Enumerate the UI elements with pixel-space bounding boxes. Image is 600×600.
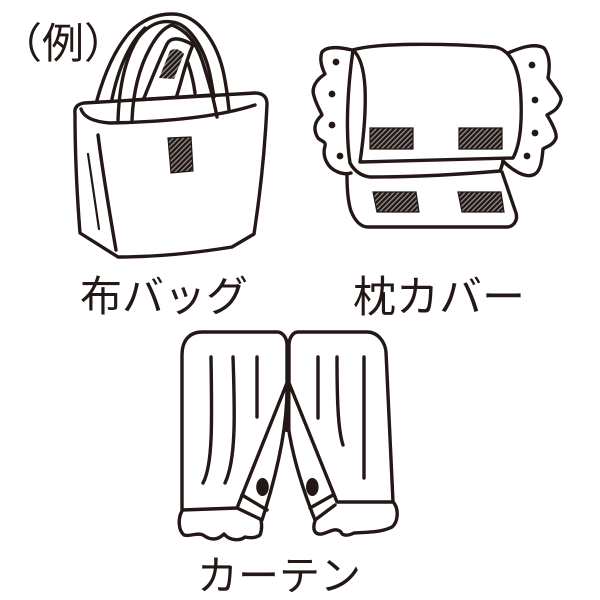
tieback bands (242, 495, 333, 510)
left frill (179, 511, 262, 540)
bag rim (81, 105, 255, 123)
label: cloth bag: 布バッグ (80, 273, 248, 320)
curtain centre seam (286, 340, 290, 432)
pillow body (347, 50, 503, 177)
bag side folds (98, 135, 116, 250)
hatched tabs (370, 128, 413, 149)
right frill (314, 503, 397, 535)
icon: curtain (179, 332, 397, 540)
pillow lower flap (347, 172, 517, 227)
tieback buttons (256, 478, 269, 496)
left curtain edge (237, 383, 287, 520)
label: example mark: （例） (0, 20, 126, 67)
hatched tag on bag (168, 137, 193, 173)
left frill (313, 48, 352, 174)
pillow front flap (353, 44, 521, 162)
pleats (203, 357, 364, 483)
right curtain edge (288, 425, 335, 520)
bag handles (97, 14, 229, 120)
label: curtain: カーテン (197, 553, 361, 599)
hatched tag on inner bag (159, 49, 184, 79)
right frill (503, 46, 561, 176)
frill holes (329, 59, 538, 159)
right curtain panel (289, 332, 393, 502)
left curtain panel (182, 332, 287, 510)
bag body (75, 93, 267, 257)
icon: pillow cover (313, 44, 561, 227)
icon: cloth bag (75, 14, 267, 257)
label: pillow cover: 枕カバー (353, 274, 525, 322)
